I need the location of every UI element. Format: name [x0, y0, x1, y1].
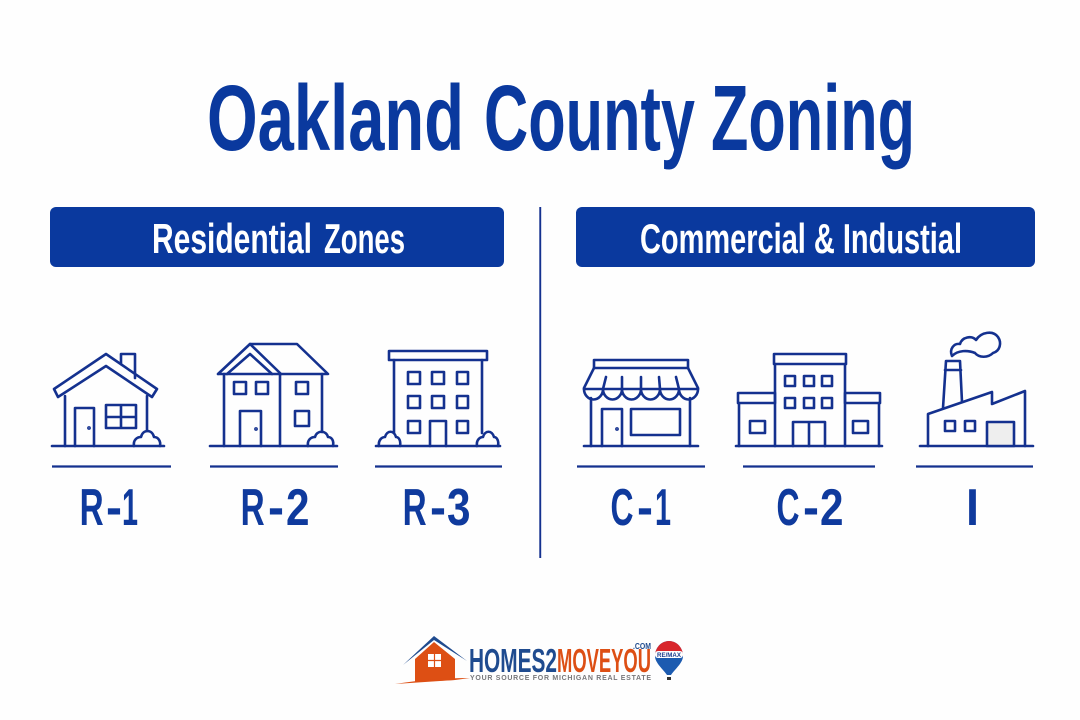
icon: R-3 apartment building	[376, 351, 500, 446]
label: R-3: R	[403, 479, 427, 537]
C-2 underline	[743, 465, 875, 468]
label: R-3: -	[430, 479, 446, 537]
label: R-1: -	[106, 479, 122, 537]
panel: commercial and industrial zones	[576, 207, 1035, 537]
icon: RE/MAX balloon	[655, 641, 683, 680]
label: C-2	[776, 479, 844, 537]
vertical divider	[539, 207, 541, 558]
logo .com: .COM	[633, 642, 651, 651]
label: I: I	[966, 479, 979, 537]
label: C-1: -	[637, 479, 653, 537]
icon: I factory	[920, 333, 1033, 446]
label: R-1	[80, 479, 138, 537]
title: County	[484, 66, 695, 170]
label: R-2: 2	[286, 479, 310, 537]
panel: residential zones	[50, 207, 504, 537]
label: C-2: C	[776, 479, 800, 537]
label: C-2: 2	[820, 479, 844, 537]
icon: R-2 house	[210, 344, 337, 446]
label: R-3: 3	[447, 479, 470, 537]
title: Zoning	[711, 66, 915, 170]
icon: logo house	[395, 636, 470, 684]
I underline	[916, 465, 1033, 468]
logo: Homes2MoveYou	[395, 636, 683, 684]
logo wordmark accent: MOVEYOU	[557, 642, 651, 679]
R-3 underline	[375, 465, 502, 468]
label: R-1: R	[80, 479, 104, 537]
label: R-3	[403, 479, 470, 537]
logo tagline: YOUR SOURCE FOR MICHIGAN REAL ESTATE	[470, 675, 651, 682]
icon: R-1 house	[52, 354, 164, 446]
label: C-1: C	[610, 479, 634, 537]
R-2 underline	[210, 465, 338, 468]
label: R-2: -	[268, 479, 284, 537]
label: C-2: -	[803, 479, 819, 537]
icon: C-2 office building	[736, 354, 882, 446]
title: Oakland	[207, 66, 464, 170]
icon: RE/MAX balloon: RE/MAX	[657, 653, 681, 659]
R-1 underline	[52, 465, 171, 468]
label: C-1: 1	[655, 479, 671, 537]
label: C-1	[610, 479, 671, 537]
heading: residential zones: Zones	[324, 215, 405, 262]
heading: residential zones	[50, 207, 504, 267]
label: R-2	[241, 479, 310, 537]
icon: C-1 storefront	[584, 360, 698, 446]
heading: commercial and industrial	[576, 207, 1035, 267]
logo wordmark: HOMES2	[469, 642, 557, 679]
title	[207, 66, 915, 170]
heading: residential zones: Residential	[152, 215, 312, 262]
label: R-2: R	[241, 479, 265, 537]
label: R-1: 1	[122, 479, 138, 537]
C-1 underline	[577, 465, 705, 468]
